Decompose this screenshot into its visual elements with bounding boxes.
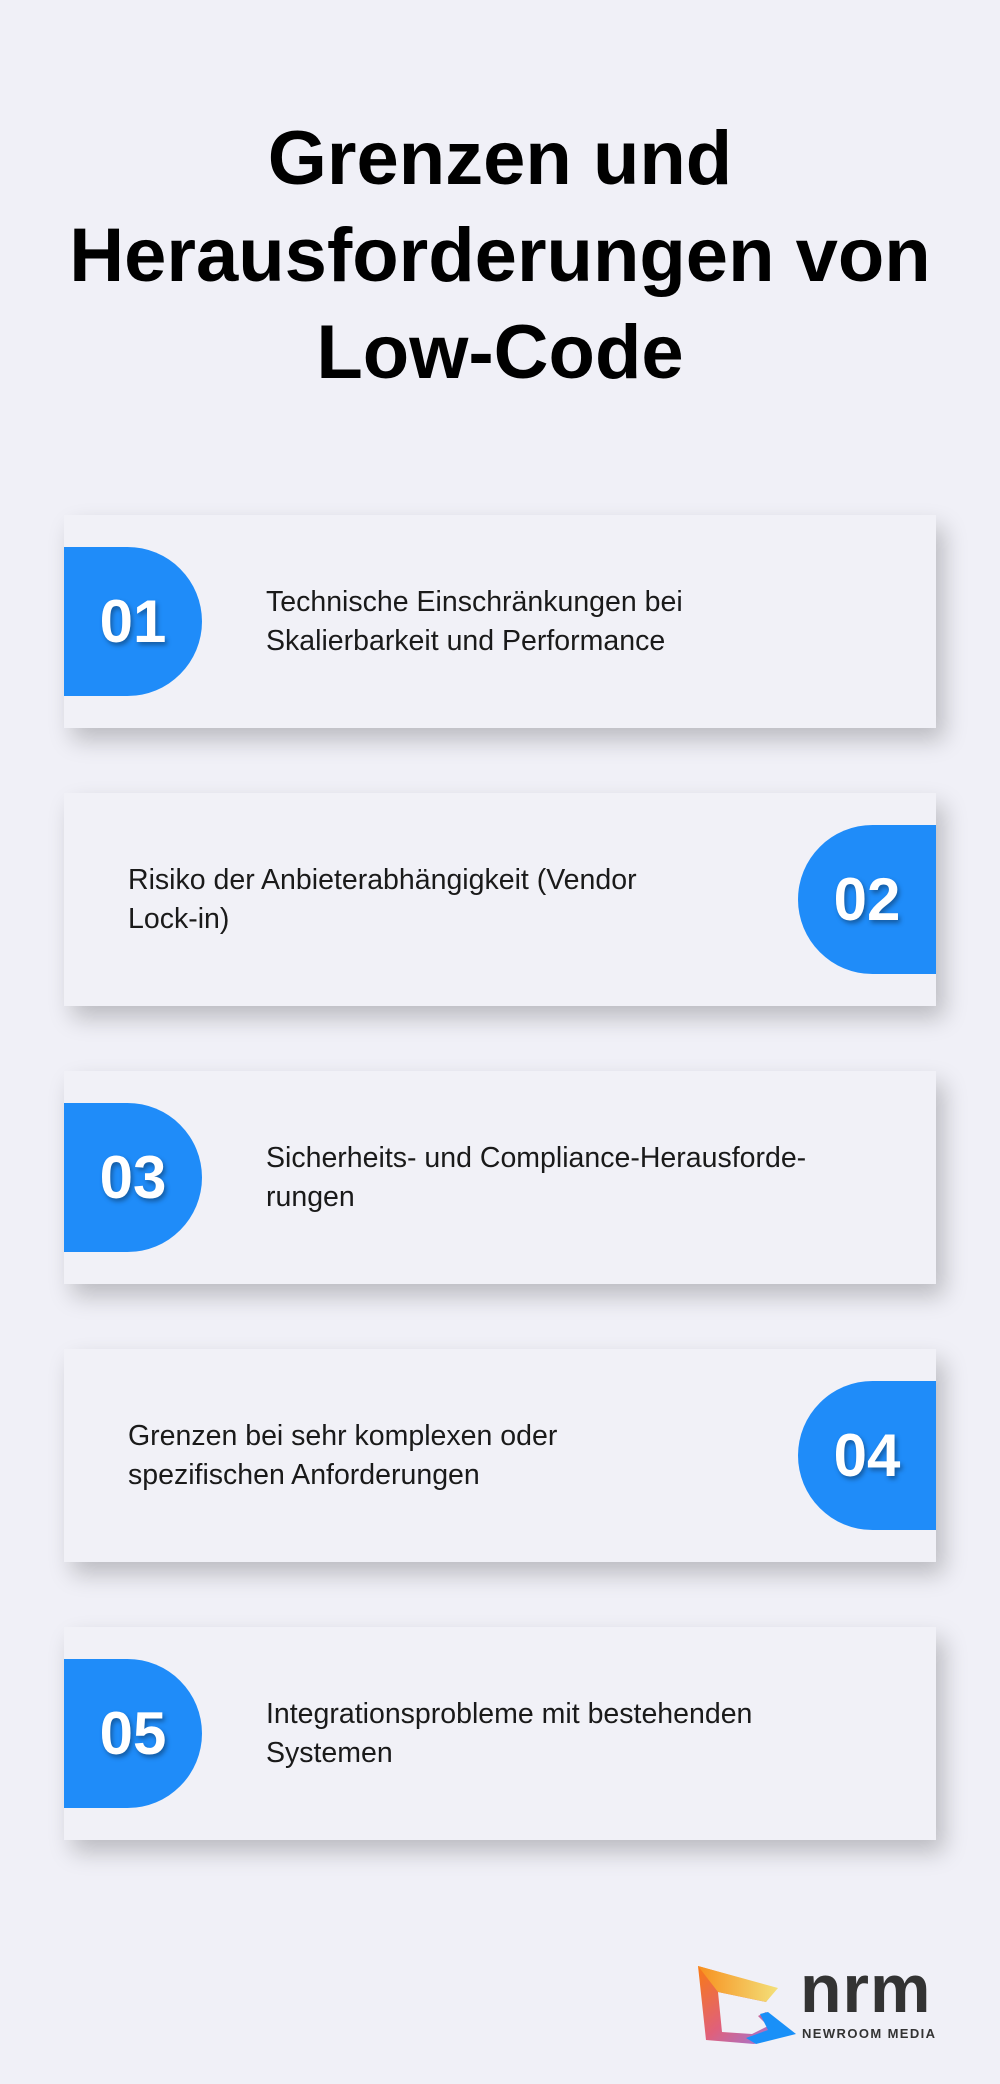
text 03 [266, 1142, 806, 1213]
text 04: Grenzen bei sehr komplexen oder [128, 1420, 557, 1452]
text 03: rungen [266, 1181, 355, 1213]
badge 03 [64, 1103, 202, 1252]
panel: card 04 [64, 1349, 936, 1562]
text 03: Sicherheits- und Compliance-Herausforde- [266, 1142, 806, 1174]
badge 02 [798, 825, 936, 974]
text 05 [266, 1698, 752, 1769]
text 02 [128, 864, 637, 935]
badge 01 [64, 547, 202, 696]
badge 01: 01 [100, 588, 166, 655]
text 05: Integrationsprobleme mit bestehenden [266, 1698, 752, 1730]
title: Herausforderungen von [69, 213, 931, 298]
panel: card 03 [64, 1071, 936, 1284]
panel: card 01 [64, 515, 936, 728]
badge 03: 03 [100, 1144, 166, 1211]
logo text: nrm [800, 1951, 931, 2027]
logo: NEWROOM MEDIA [802, 2026, 936, 2041]
text 02: Lock-in) [128, 903, 229, 935]
text 01: Technische Einschränkungen bei [266, 586, 683, 618]
text 02: Risiko der Anbieterabhängigkeit (Vendor [128, 864, 637, 896]
badge 04: 04 [834, 1422, 900, 1489]
badge 05 [64, 1659, 202, 1808]
badge 04 [798, 1381, 936, 1530]
title: Low-Code [316, 310, 684, 395]
panel: card 02 [64, 793, 936, 1006]
text 01 [266, 586, 683, 657]
text 04 [128, 1420, 557, 1491]
title: Grenzen und [268, 116, 732, 201]
badge 05: 05 [100, 1700, 166, 1767]
text 01: Skalierbarkeit und Performance [266, 625, 665, 657]
badge 02: 02 [834, 866, 900, 933]
panel: card 05 [64, 1627, 936, 1840]
text 05: Systemen [266, 1737, 393, 1769]
icon: logo mark [698, 1966, 796, 2044]
title [69, 116, 931, 395]
text 04: spezifischen Anforderungen [128, 1459, 480, 1491]
logo [698, 1951, 936, 2044]
